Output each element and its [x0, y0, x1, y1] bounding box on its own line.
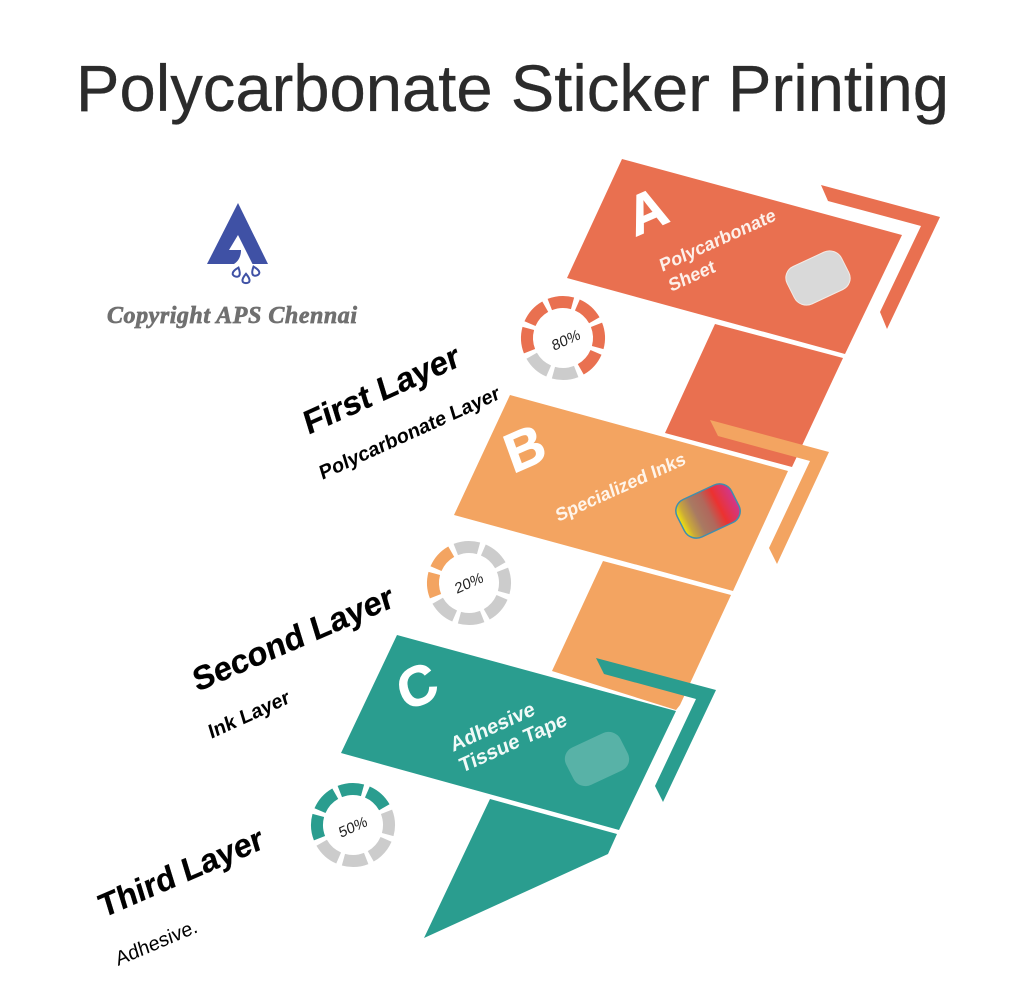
card C label: Adhesive [448, 697, 537, 757]
icon: gray sticker [781, 247, 855, 309]
card B label: Specialized Inks [553, 447, 688, 526]
subheading: polycarbonate layer: Polycarbonate Layer [317, 382, 503, 485]
card A label line two: Sheet [666, 255, 718, 296]
title: Polycarbonate Sticker Printing [76, 51, 949, 125]
panel: orange lower block [552, 561, 731, 710]
heading: third layer: Third Layer [95, 820, 268, 925]
panel: red lower block [665, 324, 843, 467]
icon: translucent sticker [560, 728, 634, 790]
panel: card C adhesive tissue tape [341, 635, 676, 830]
subheading: ink layer: Ink Layer [206, 686, 293, 744]
panel: card B specialized inks [454, 395, 788, 591]
ring: 50 percent [306, 778, 400, 872]
ring: 80 percent: 80% [550, 326, 582, 355]
card C label line two: Tissue Tape [457, 708, 570, 778]
chevron C [596, 658, 716, 802]
copyright text: Copyright APS Chennai [107, 303, 357, 329]
panel: card A polycarbonate sheet [567, 159, 902, 354]
icon: ink gradient sticker [671, 480, 745, 542]
subheading: adhesive: Adhesive. [113, 916, 200, 971]
icon: card A letter: A [619, 174, 675, 248]
chevron B [710, 420, 829, 564]
panel: teal pointed tip [424, 799, 617, 938]
ring: 80 percent [516, 291, 610, 385]
heading: second layer: Second Layer [188, 577, 398, 699]
icon: card C letter: C [389, 649, 445, 723]
chevron A [821, 185, 940, 329]
ring: 20 percent [422, 536, 516, 630]
card A label: Polycarbonate [657, 204, 778, 276]
ring: 50 percent: 50% [337, 813, 369, 842]
ring: 20 percent: 20% [453, 569, 485, 598]
icon: card B letter: B [496, 411, 553, 485]
logo: APS droplet A [207, 203, 268, 283]
heading: first layer: First Layer [299, 337, 464, 442]
